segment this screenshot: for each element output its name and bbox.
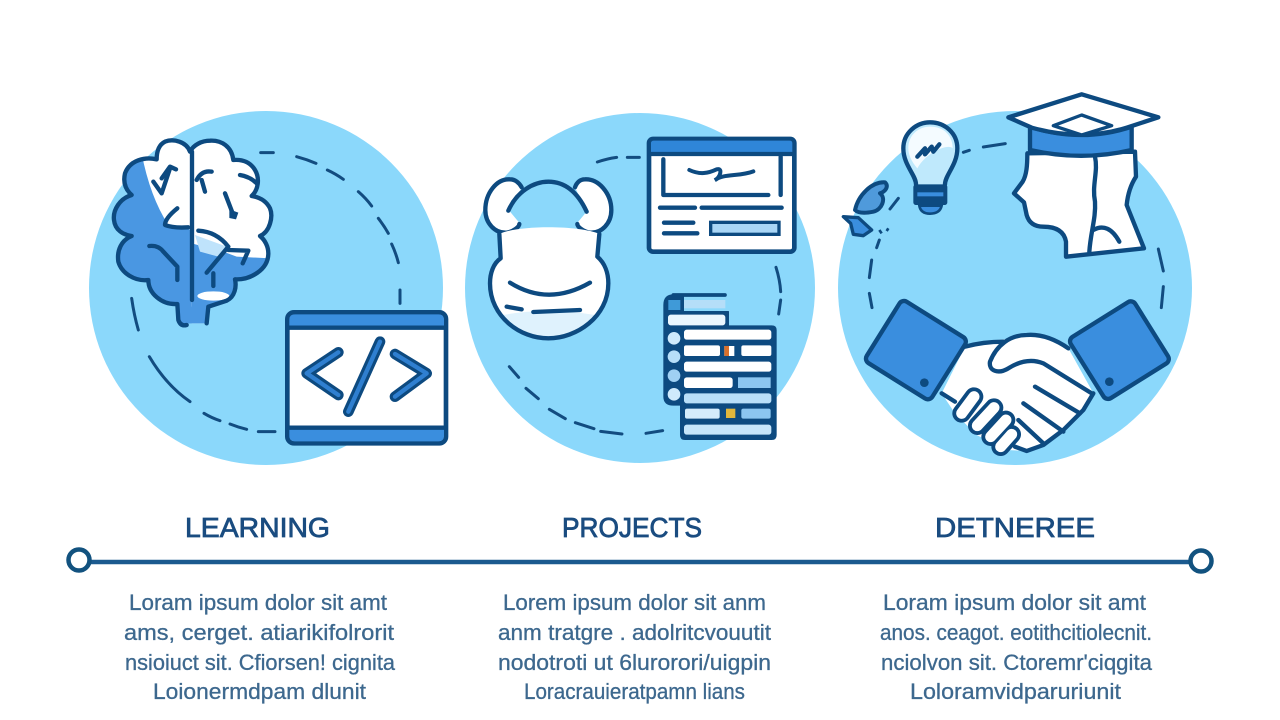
text block: degree: nciolvon sit. Ctoremr'ciqgita bbox=[881, 650, 1153, 675]
text block: learning: Loionermdpam dlunit bbox=[153, 679, 366, 704]
text block: projects: nodotroti ut 6lurorori/uigpin bbox=[498, 650, 771, 675]
text block: degree: anos. ceagot. eotithcitiolecnit. bbox=[880, 620, 1152, 645]
background circle: learning bbox=[89, 111, 443, 465]
background circle: degree bbox=[838, 111, 1192, 465]
dashed orbit bbox=[509, 157, 781, 434]
panel: learning bbox=[89, 111, 446, 704]
dashed orbit bbox=[869, 144, 1163, 308]
heading: projects: PROJECTS bbox=[562, 512, 702, 543]
timeline bbox=[68, 550, 1212, 572]
heading: learning: LEARNING bbox=[185, 512, 330, 543]
text block: learning: nsioiuct sit. Cfiorsen! cignita bbox=[125, 650, 396, 675]
icon: head with ears bbox=[485, 179, 611, 338]
text block: projects bbox=[498, 590, 771, 704]
icon: code window bbox=[287, 312, 446, 443]
icon: person with graduation cap bbox=[1008, 94, 1158, 257]
infographic bbox=[66, 92, 1214, 704]
icon: handshake bbox=[864, 299, 1171, 451]
timeline end node bbox=[1190, 550, 1212, 572]
text block: learning: Loram ipsum dolor sit amt bbox=[129, 590, 387, 615]
icons: projects bbox=[485, 139, 794, 439]
text block: learning: ams, cerget. atiarikifolrorit bbox=[124, 620, 394, 645]
text block: degree bbox=[880, 590, 1153, 704]
background circle: projects bbox=[465, 113, 815, 463]
heading: degree: DETNEREE bbox=[935, 512, 1095, 543]
icon: brain bbox=[110, 140, 271, 330]
timeline start node bbox=[68, 550, 90, 570]
text block: degree: Loloramvidparuriunit bbox=[910, 679, 1121, 704]
icon: server stack bbox=[664, 295, 776, 439]
icon: light bulb bbox=[903, 122, 957, 214]
text block: learning bbox=[124, 590, 396, 704]
dashed orbit bbox=[132, 153, 400, 432]
text block: projects: Lorem ipsum dolor sit anm bbox=[503, 590, 766, 615]
icon: web page window bbox=[649, 139, 794, 252]
panel: degree bbox=[838, 94, 1192, 704]
icons: degree bbox=[843, 94, 1171, 451]
text block: projects: anm tratgre . adolritcvouutit bbox=[498, 620, 771, 645]
panel: projects bbox=[465, 113, 815, 704]
icon: small bird bbox=[843, 182, 888, 236]
text block: projects: Loracrauieratpamn lians bbox=[524, 679, 745, 704]
text block: degree: Loram ipsum dolor sit amt bbox=[883, 590, 1146, 615]
icons: learning bbox=[110, 140, 446, 443]
